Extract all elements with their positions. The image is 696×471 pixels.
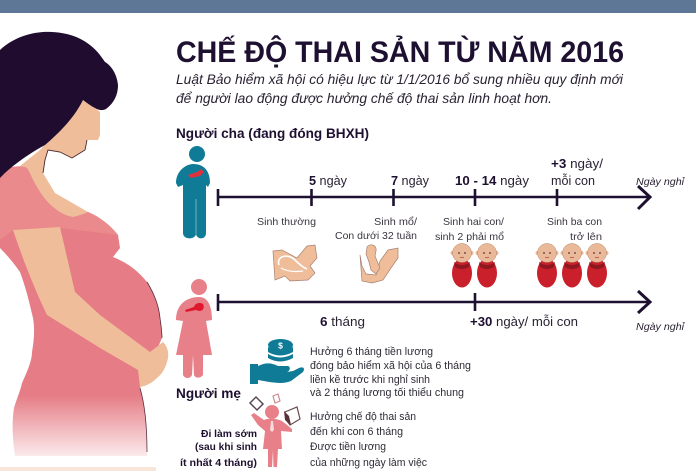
icon: mother (176, 279, 212, 378)
text: maternity benefit until child is 6 months: đến khi con 6 tháng (310, 426, 403, 438)
subtitle: để người lao động được hưởng chế độ thai sản linh hoạt hơn. (176, 90, 552, 106)
belly contour (140, 282, 162, 452)
skin: face, neck and chest (0, 100, 100, 225)
text: salary benefit: liền kề trước khi nghỉ sinh (310, 374, 430, 386)
label: +3 days per child: mỗi con (551, 173, 595, 188)
body: torso and belly (0, 166, 162, 456)
text: paid for working days (310, 441, 427, 469)
caption: triplets: trở lên (570, 231, 602, 243)
caption: caesarean (335, 216, 417, 242)
top banner (0, 0, 696, 13)
arm resting on belly (13, 227, 168, 387)
caption: triplets (547, 216, 602, 243)
timeline: father (218, 186, 650, 209)
illustration: pregnant woman (0, 32, 168, 471)
caption: triplets: Sinh ba con (547, 216, 602, 228)
text: salary benefit: đóng bảo hiểm xã hội của 6 tháng (310, 360, 471, 372)
text: return to work early: (sau khi sinh (195, 442, 257, 453)
label: 6 months: 6 tháng (320, 315, 365, 329)
subtitle (176, 71, 624, 106)
upper body lighter tone (0, 166, 118, 240)
caption: normal birth: Sinh thường (257, 216, 316, 228)
lower beige fade (0, 467, 156, 471)
caption: caesarean: Sinh mổ/ (374, 216, 417, 228)
icon: twin babies (450, 244, 498, 288)
axis label: days off: Ngày nghỉ (636, 321, 685, 333)
text: salary benefit: Hưởng 6 tháng tiền lương (310, 346, 433, 358)
icon: triplet babies (536, 244, 608, 288)
timeline: mother (218, 291, 650, 313)
icon: father (176, 146, 210, 238)
label: +30 days per child: +30 ngày/ mỗi con (470, 314, 578, 329)
icon: hands holding baby, caesarean (360, 245, 398, 283)
label: 5 days: 5 ngày (309, 174, 348, 188)
axis label: days off: Ngày nghỉ (636, 176, 685, 188)
hair (0, 32, 118, 178)
label: +3 days per child: +3 ngày/ (551, 157, 604, 171)
icon: hands holding baby, normal birth (273, 245, 317, 281)
icon: coins in hand: $ (278, 340, 283, 350)
jaw contour (43, 140, 87, 173)
heading: father: Người cha (đang đóng BHXH) (176, 126, 369, 141)
label: 10-14 days: 10 - 14 ngày (455, 174, 530, 188)
icon: coins in hand (250, 339, 304, 384)
text: return to work early: Đi làm sớm (201, 429, 257, 440)
title: CHẾ ĐỘ THAI SẢN TỪ NĂM 2016 (176, 35, 624, 69)
icon: working woman juggling papers (250, 394, 300, 467)
heading: mother: Người mẹ (176, 385, 241, 401)
text: paid for working days: Được tiền lương (310, 441, 386, 453)
caption: twins: Sinh hai con/ (443, 216, 504, 228)
caption: twins (435, 216, 504, 243)
caption: twins: sinh 2 phải mổ (435, 231, 504, 243)
text: maternity benefit until child is 6 months (310, 411, 416, 438)
label: 7 days: 7 ngày (391, 174, 430, 188)
label: +3 days per child (551, 157, 604, 188)
text: paid for working days: của những ngày làm việc (310, 457, 427, 469)
text: salary benefit (310, 346, 471, 399)
subtitle: Luật Bảo hiểm xã hội có hiệu lực từ 1/1/2016 bổ sung nhiều quy định mới (176, 71, 624, 87)
text: return to work early (180, 429, 257, 469)
text: return to work early: ít nhất 4 tháng) (180, 457, 257, 469)
text: salary benefit: và 2 tháng lương tối thiểu chung (310, 387, 464, 399)
text: maternity benefit until child is 6 months: Hưởng chế độ thai sản (310, 411, 416, 423)
caption: caesarean: Con dưới 32 tuần (335, 230, 417, 242)
